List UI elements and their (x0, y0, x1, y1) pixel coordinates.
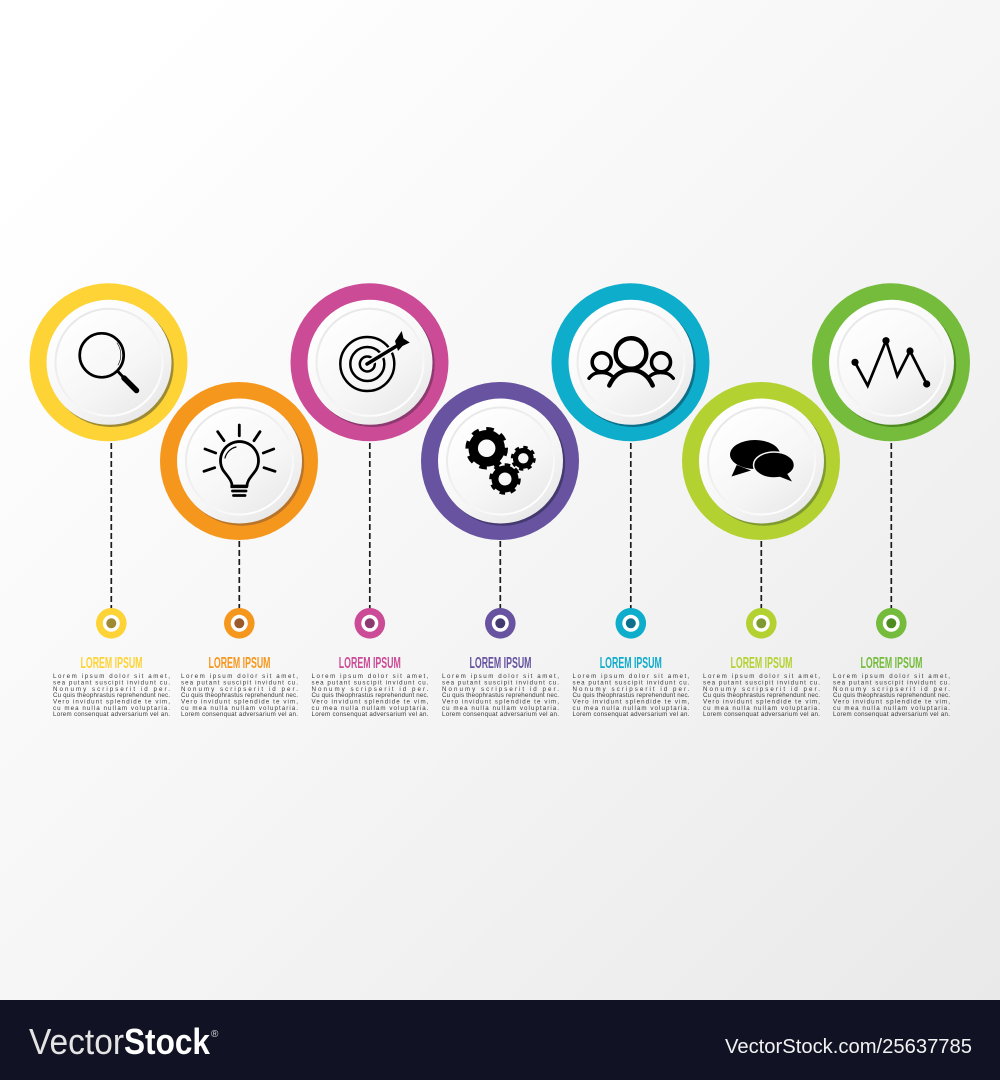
text block: step 6 (703, 655, 820, 718)
text block: step 2 (181, 655, 298, 718)
heading: step 6: LOREM IPSUM (730, 655, 792, 672)
body: step 1: Nonumy scripserit id per. (53, 686, 170, 693)
icon: people group (589, 338, 673, 386)
body: step 3: Lorem ipsum dolor sit amet, (312, 673, 429, 680)
marker: orange (224, 608, 255, 639)
marker: yellow (96, 608, 127, 639)
body: step 5 (572, 673, 690, 718)
body: step 6: Cu quis theophrastus reprehendunt nec. (703, 692, 820, 699)
body: step 7: cu mea nulla nullam voluptaria. (833, 705, 950, 712)
body: step 3 (312, 673, 429, 718)
body: step 1 (53, 673, 170, 718)
body: step 6: Lorem ipsum dolor sit amet, (703, 673, 820, 680)
connector: step 5 (630, 443, 632, 609)
body: step 2: Vero invidunt splendide te vim, (181, 698, 298, 706)
body: step 7: Vero invidunt splendide te vim, (833, 698, 950, 706)
text block: step 3 (312, 655, 429, 718)
body: step 1: Lorem consenquat adversarium vel an. (53, 711, 170, 718)
connector: step 2 (238, 541, 240, 609)
body: step 6: Nonumy scripserit id per. (703, 686, 820, 693)
badge: purple gears (421, 382, 579, 540)
text block: step 7 (833, 655, 950, 718)
marker: cyan (616, 608, 646, 639)
body: step 2: Lorem ipsum dolor sit amet, (181, 673, 298, 680)
body: step 4: Nonumy scripserit id per. (442, 686, 559, 693)
marker: lime (746, 608, 777, 639)
body: step 3: Nonumy scripserit id per. (312, 686, 429, 693)
body: step 6: cu mea nulla nullam voluptaria. (703, 705, 820, 712)
badge: green chart (812, 283, 970, 441)
badge: pink target (290, 283, 448, 441)
body: step 7: Cu quis theophrastus reprehendunt nec. (833, 692, 950, 699)
body: step 1: Lorem ipsum dolor sit amet, (53, 673, 170, 680)
connector: step 4 (499, 541, 501, 609)
body: step 2: Lorem consenquat adversarium vel an. (181, 711, 298, 718)
body: step 3: sea putant suscipit invidunt cu. (312, 680, 429, 686)
body: step 4 (442, 673, 559, 718)
body: step 1: Cu quis theophrastus reprehendunt nec. (53, 692, 170, 699)
body: step 2: sea putant suscipit invidunt cu. (181, 680, 298, 686)
body: step 7: sea putant suscipit invidunt cu. (833, 680, 950, 686)
heading: step 3: LOREM IPSUM (339, 655, 401, 672)
body: step 4: Lorem ipsum dolor sit amet, (442, 673, 559, 680)
body: step 1: cu mea nulla nullam voluptaria. (53, 705, 170, 712)
body: step 5: Lorem ipsum dolor sit amet, (572, 673, 690, 680)
badge: yellow search (30, 283, 188, 441)
body: step 2: Nonumy scripserit id per. (181, 686, 298, 693)
footer bar (0, 1000, 1000, 1080)
body: step 4: Vero invidunt splendide te vim, (442, 698, 559, 706)
body: step 4: Cu quis theophrastus reprehendunt nec. (442, 692, 559, 699)
footer image id: VectorStock.com/25637785 (725, 1036, 972, 1058)
badge: orange idea (160, 382, 318, 540)
badge: cyan team (552, 283, 710, 441)
body: step 6: sea putant suscipit invidunt cu. (703, 680, 820, 686)
footer logo: Stock: Stock (124, 1021, 211, 1062)
body: step 3: Lorem consenquat adversarium vel an. (312, 711, 429, 718)
badge: lime chat (682, 382, 840, 540)
registered mark: ® (211, 1029, 219, 1040)
marker: pink (354, 608, 385, 639)
body: step 5: Cu quis theophrastus reprehendunt nec. (572, 692, 690, 699)
body: step 3: Cu quis theophrastus reprehendunt nec. (312, 692, 429, 699)
body: step 7 (833, 673, 950, 718)
icon: line chart (851, 337, 930, 388)
body: step 4: sea putant suscipit invidunt cu. (442, 680, 559, 686)
body: step 7: Lorem consenquat adversarium vel an. (833, 711, 950, 718)
body: step 7: Nonumy scripserit id per. (833, 686, 950, 693)
body: step 5: Vero invidunt splendide te vim, (572, 698, 690, 706)
body: step 2 (181, 673, 298, 718)
body: step 1: sea putant suscipit invidunt cu. (53, 680, 170, 686)
heading: step 7: LOREM IPSUM (860, 655, 922, 672)
body: step 5: sea putant suscipit invidunt cu. (572, 680, 690, 686)
marker: purple (485, 608, 516, 639)
heading: step 1: LOREM IPSUM (80, 655, 142, 672)
body: step 6 (703, 673, 820, 718)
connector: step 7 (890, 443, 892, 609)
marker: green (876, 608, 907, 639)
body: step 5: Lorem consenquat adversarium vel an. (572, 711, 690, 718)
icon: speech bubbles (730, 440, 794, 482)
footer logo: Vector: Vector (29, 1021, 124, 1062)
body: step 2: Cu quis theophrastus reprehendunt nec. (181, 692, 298, 699)
body: step 3: cu mea nulla nullam voluptaria. (312, 705, 429, 712)
icon: target with arrow (340, 331, 410, 391)
body: step 6: Vero invidunt splendide te vim, (703, 698, 820, 706)
text block: step 1 (53, 655, 170, 718)
connector: step 1 (110, 443, 112, 609)
body: step 5: Nonumy scripserit id per. (572, 686, 690, 693)
connector: step 3 (369, 443, 371, 609)
body: step 7: Lorem ipsum dolor sit amet, (833, 673, 950, 680)
heading: step 5: LOREM IPSUM (600, 655, 662, 672)
body: step 4: Lorem consenquat adversarium vel an. (442, 711, 559, 718)
body: step 4: cu mea nulla nullam voluptaria. (442, 705, 559, 712)
connector: step 6 (760, 541, 762, 609)
body: step 1: Vero invidunt splendide te vim, (53, 698, 170, 706)
body: step 6: Lorem consenquat adversarium vel an. (703, 711, 820, 718)
body: step 2: cu mea nulla nullam voluptaria. (181, 705, 298, 712)
text block: step 5 (572, 655, 690, 718)
body: step 5: cu mea nulla nullam voluptaria. (572, 705, 690, 712)
body: step 3: Vero invidunt splendide te vim, (312, 698, 429, 706)
heading: step 4: LOREM IPSUM (470, 655, 532, 672)
icon: light bulb (204, 425, 275, 496)
icon: gears (468, 430, 534, 493)
icon: magnifying glass (80, 333, 136, 390)
text block: step 4 (442, 655, 559, 718)
heading: step 2: LOREM IPSUM (208, 655, 270, 672)
